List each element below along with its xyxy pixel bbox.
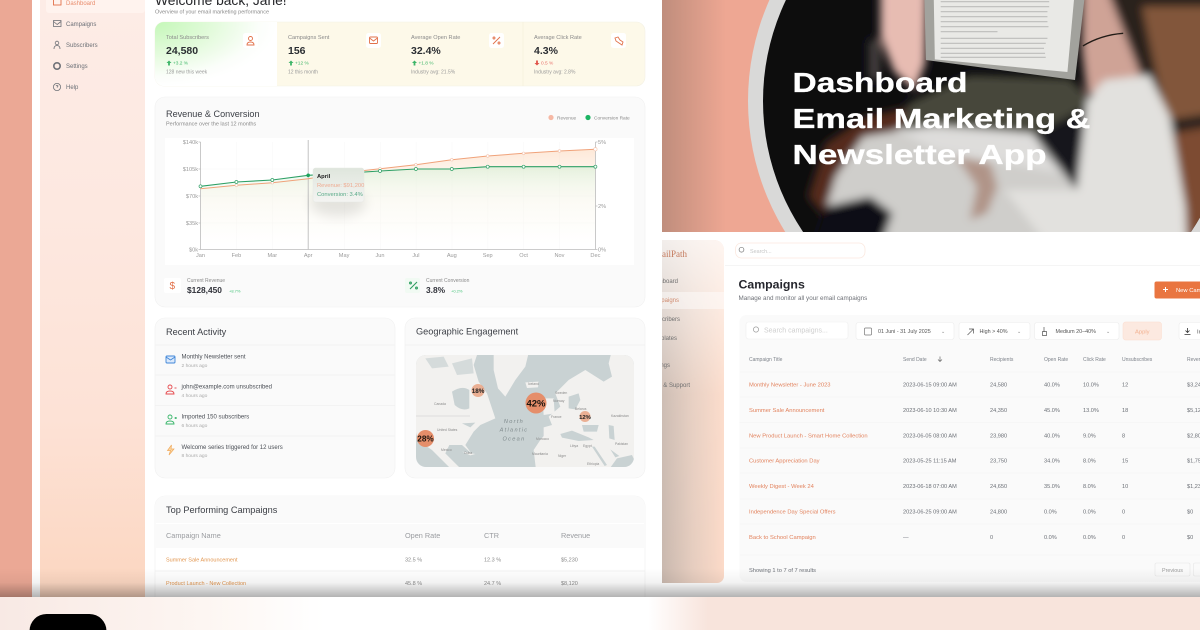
bubble 28%: 28%: [417, 435, 434, 444]
date filter: [856, 322, 954, 340]
row 4: 2023-05-25 11:15 AM: [903, 458, 957, 464]
place labels: Egypt: [583, 444, 592, 448]
row 5: 35.0%: [1044, 484, 1060, 490]
activity: newsletter sent: 2 hours ago: [182, 363, 208, 369]
row 7: 0: [990, 535, 993, 541]
activity heading: Recent Activity: [166, 327, 227, 337]
card: total subscribers: +3.2 %: [173, 60, 189, 66]
ocean label: North: [504, 419, 524, 425]
date filter: ⌄: [941, 329, 945, 335]
y axis left labels: $140k: [183, 140, 198, 146]
lower right campaigns screen: [648, 232, 1200, 597]
axes: [198, 142, 598, 250]
row 5: 2023-06-18 07:00 AM: [903, 484, 957, 490]
date filter: 01 Juni - 31 July 2025: [878, 329, 931, 335]
row: summer sale: $5,230: [561, 558, 578, 564]
x axis labels: Apr: [304, 253, 313, 259]
top search box: [736, 243, 865, 258]
row 1: 12: [1122, 382, 1128, 388]
bubble 18%: 18%: [472, 388, 485, 395]
place labels: France: [551, 415, 562, 419]
campaigns sidebar: Help & Support: [649, 383, 690, 389]
row: product launch: [166, 581, 578, 587]
row: product launch: Product Launch - New Collection: [166, 581, 246, 587]
x axis labels: Nov: [555, 253, 565, 259]
place labels: Libya: [570, 444, 578, 448]
campaigns sidebar: Dashboard: [649, 279, 678, 285]
place labels: Iceland: [528, 382, 539, 386]
table header row: Open Rate: [405, 531, 440, 540]
row 5: 8.0%: [1083, 484, 1096, 490]
row 6: [749, 510, 1193, 516]
ocean label: Ocean: [503, 436, 525, 442]
card: average open rate: 32.4%: [411, 45, 441, 57]
geo heading: Geographic Engagement: [416, 326, 519, 336]
ocean label: [500, 419, 527, 440]
table header: Click Rate: [1083, 357, 1106, 363]
activity: unsubscribed: 4 hours ago: [182, 393, 208, 399]
row 2: Summer Sale Announcement: [749, 408, 825, 414]
x axis labels: Sep: [483, 253, 493, 259]
place labels: Ethiopia: [587, 462, 599, 466]
place labels: Kazakhstan: [611, 414, 629, 418]
activity: welcome series: [168, 445, 283, 459]
row 6: 2023-06-25 09:00 AM: [903, 510, 957, 516]
row 4: [749, 458, 1200, 464]
place labels: Canada: [434, 402, 446, 406]
campaigns sidebar: Subscribers: [648, 317, 680, 323]
row: product launch: $8,120: [561, 581, 578, 587]
row 3: 40.0%: [1044, 433, 1060, 439]
new campaign button: [1154, 282, 1200, 298]
table header row: [166, 531, 590, 540]
KPI card strip: [155, 22, 645, 86]
row: product launch: 24.7 %: [484, 581, 501, 587]
open rate filter: ⌄: [1017, 329, 1021, 335]
nav label: dashboard: Dashboard: [66, 1, 95, 7]
bubble 42%: [526, 392, 546, 414]
x axis labels: Mar: [267, 253, 277, 259]
legend: [548, 115, 630, 122]
place labels: Morocco: [536, 437, 549, 441]
row 6: $0: [1187, 510, 1193, 516]
place labels: Norway: [553, 399, 565, 403]
nav label: subscribers: Subscribers: [66, 43, 98, 49]
row 2: 13.0%: [1083, 408, 1099, 414]
campaigns sidebar: Templates: [650, 336, 677, 342]
row 6: 0.0%: [1044, 510, 1057, 516]
x axis labels: Aug: [447, 253, 457, 259]
black logo badge: [30, 614, 106, 630]
bottom shadow: [0, 568, 1200, 597]
row 1: 10.0%: [1083, 382, 1099, 388]
panel: recent activity: [155, 318, 395, 478]
row: summer sale: 12.3 %: [484, 558, 501, 564]
row 6: 0: [1122, 510, 1125, 516]
stat: current revenue: Current Revenue: [187, 278, 225, 284]
stat: current conversion: [405, 278, 470, 295]
bubble 18%: [472, 384, 485, 397]
hero title: Email Marketing &: [792, 103, 1090, 134]
table header: [749, 356, 1200, 363]
activity: imported: [166, 415, 249, 429]
revenue line: [200, 148, 597, 189]
main heading: [155, 0, 287, 16]
row 7: —: [903, 535, 909, 541]
row 2: 2023-06-10 10:30 AM: [903, 408, 957, 414]
activity: imported: Imported 150 subscribers: [182, 415, 249, 421]
row 2: 18: [1122, 408, 1128, 414]
pagination buttons: [1155, 563, 1200, 576]
card: total subscribers: 24,580: [166, 45, 198, 57]
y axis left labels: $105k: [183, 167, 198, 173]
world map: [416, 355, 634, 467]
row 3: 9.0%: [1083, 433, 1096, 439]
row 5: [749, 484, 1200, 490]
card: total subscribers: [155, 22, 277, 86]
left salmon band: [0, 0, 32, 597]
y axis right labels: [598, 140, 606, 254]
nav icon: campaigns: [54, 20, 61, 26]
page title: Campaigns: [738, 278, 805, 292]
row 5: 24,650: [990, 484, 1007, 490]
activity: imported: 6 hours ago: [182, 423, 208, 429]
nav icon: dashboard: [54, 0, 61, 5]
page subtitle: Manage and monitor all your email campaigns: [738, 295, 867, 302]
hero title: Newsletter App: [792, 139, 1046, 170]
chart heading: Revenue & Conversion: [166, 109, 260, 119]
row 4: Customer Appreciation Day: [749, 458, 820, 464]
stat: current conversion: Current Conversion: [426, 278, 470, 284]
table panel: [740, 315, 1200, 582]
hero title: Dashboard: [792, 67, 968, 98]
panel: geographic engagement: [405, 318, 645, 478]
row 2: 24,350: [990, 408, 1007, 414]
x axis labels: Oct: [519, 253, 528, 259]
row 3: 8: [1122, 433, 1125, 439]
panel: revenue and conversion: [155, 97, 645, 307]
stat: current revenue: $128,450: [187, 285, 222, 295]
card: campaigns sent: [288, 33, 381, 76]
row 4: 15: [1122, 458, 1128, 464]
row 1: 40.0%: [1044, 382, 1060, 388]
row 5: Weekly Digest - Week 24: [749, 484, 815, 490]
open rate filter: High > 40%: [980, 329, 1008, 335]
active nav highlight: [46, 0, 145, 13]
card: average click rate: Industry avg: 2.8%: [534, 70, 576, 76]
place labels: United States: [437, 428, 458, 432]
campaigns sidebar: [662, 240, 724, 583]
panel: top performing campaigns: [155, 496, 645, 616]
pagination summary: Showing 1 to 7 of 7 results: [749, 568, 816, 574]
place labels: [434, 382, 629, 466]
table header row: CTR: [484, 531, 499, 540]
x axis labels: Jan: [196, 253, 205, 259]
bubble 12%: 12%: [579, 415, 592, 421]
search campaigns input: Search campaigns...: [764, 328, 828, 334]
row 5: 10: [1122, 484, 1128, 490]
card: average click rate: Average Click Rate: [534, 35, 582, 41]
row 4: 34.0%: [1044, 458, 1060, 464]
table header: Unsubscribes: [1122, 357, 1153, 363]
place labels: Belarus: [575, 407, 587, 411]
row 7: 0: [1122, 535, 1125, 541]
row 1: Monthly Newsletter - June 2023: [749, 382, 831, 388]
bubble 12%: [579, 411, 592, 422]
row 1: [749, 382, 1200, 388]
hero photo circle: reading on a tablet: [748, 0, 1200, 232]
row 6: 24,800: [990, 510, 1007, 516]
stat: current conversion: +0.2%: [451, 288, 463, 294]
right salmon background: [662, 0, 1200, 232]
legend: Conversion Rate: [594, 116, 630, 122]
subheading: Overview of your email marketing performance: [155, 10, 269, 16]
campaigns sidebar: Settings: [648, 363, 670, 369]
row 3: New Product Launch - Smart Home Collection: [749, 433, 868, 439]
place labels: Cuba: [464, 451, 472, 455]
row 7: 0.0%: [1044, 535, 1057, 541]
activity: unsubscribed: john@example.com unsubscribed: [180, 384, 272, 390]
activity: newsletter sent: [166, 354, 246, 369]
nav icon: help: [53, 83, 61, 91]
row 2: 45.0%: [1044, 408, 1060, 414]
row 7: $0: [1187, 535, 1193, 541]
card: average open rate: Industry avg: 21.5%: [411, 70, 456, 76]
left dashboard sidebar: [40, 0, 145, 597]
nav label: campaigns: Campaigns: [66, 22, 96, 28]
bottom strip: [0, 597, 1200, 630]
activity: unsubscribed: [166, 384, 272, 399]
row 7: 0.0%: [1083, 535, 1096, 541]
row: product launch: 45.8 %: [405, 581, 422, 587]
table header: Recipients: [990, 357, 1014, 363]
top search box: Search...: [750, 249, 772, 255]
row 6: Independence Day Special Offers: [749, 510, 836, 516]
y axis right labels: 0%: [598, 248, 606, 254]
import button: [1179, 322, 1200, 340]
row 7: Back to School Campaign: [749, 535, 816, 541]
click rate filter: ⌄: [1106, 329, 1110, 335]
row 3: [749, 433, 1200, 439]
row 2: [749, 408, 1200, 414]
place labels: Sweden: [555, 391, 567, 395]
pagination buttons: Previous: [1162, 568, 1183, 574]
place labels: Mauritania: [532, 452, 548, 456]
card: average click rate: 4.3%: [534, 45, 559, 57]
nav icon: settings: [54, 63, 60, 69]
table header: Open Rate: [1044, 357, 1068, 363]
click rate filter: Medium 20–40%: [1056, 329, 1096, 335]
card: average open rate: Average Open Rate: [411, 35, 460, 41]
bubble 42%: 42%: [526, 398, 546, 410]
row: summer sale: [166, 558, 578, 564]
table heading: Top Performing Campaigns: [166, 505, 278, 515]
row 4: 23,750: [990, 458, 1007, 464]
table header: Send Date: [903, 357, 927, 363]
activity: newsletter sent: Monthly Newsletter sent: [182, 354, 246, 360]
y axis left labels: $35k: [186, 221, 198, 227]
place labels: Mexico: [441, 448, 452, 452]
card: campaigns sent: 12 this month: [288, 70, 318, 76]
x axis labels: Jul: [412, 253, 419, 259]
card: campaigns sent: +12 %: [295, 60, 309, 66]
stat: current conversion: 3.8%: [426, 285, 446, 295]
hero title: [792, 67, 1090, 170]
place labels: Pakistan: [615, 442, 628, 446]
row 4: 8.0%: [1083, 458, 1096, 464]
row: summer sale: 32.5 %: [405, 558, 422, 564]
card: total subscribers: Total Subscribers: [166, 35, 209, 41]
brand name: MailPath: [654, 249, 687, 259]
row: summer sale: Summer Sale Announcement: [166, 558, 238, 564]
x axis labels: Jun: [375, 253, 385, 259]
card: average click rate: [523, 22, 626, 86]
x axis labels: Feb: [232, 253, 241, 259]
ocean label: Atlantic: [499, 428, 528, 434]
nav label: settings: Settings: [66, 64, 88, 70]
card: average click rate: 0.5 %: [541, 60, 554, 66]
y axis left labels: $70k: [186, 194, 198, 200]
table header: Campaign Title: [749, 357, 783, 363]
campaigns sidebar: Campaigns: [649, 298, 679, 304]
row 3: 23,980: [990, 433, 1007, 439]
open rate filter: [959, 322, 1030, 340]
row 1: 2023-06-15 09:00 AM: [903, 382, 957, 388]
card: campaigns sent: Campaigns Sent: [288, 35, 330, 41]
table header row: Campaign Name: [166, 531, 221, 540]
card: total subscribers: 128 new this week: [166, 70, 208, 76]
y axis right labels: 2%: [598, 204, 606, 210]
activity: welcome series: 8 hours ago: [182, 453, 208, 459]
x axis labels: May: [339, 253, 350, 259]
stat: current revenue: [164, 278, 241, 295]
nav icon: subscribers: [54, 41, 60, 49]
legend: Revenue: [557, 116, 577, 122]
chart subheading: Performance over the last 12 months: [166, 122, 256, 128]
click rate filter: [1034, 322, 1119, 340]
y axis right labels: 5%: [598, 140, 606, 146]
row 6: 0.0%: [1083, 510, 1096, 516]
activity: welcome series: Welcome series triggered for 12 users: [182, 445, 283, 451]
card: campaigns sent: 156: [288, 45, 306, 57]
search campaigns input: [746, 322, 848, 339]
april marker line: [307, 140, 309, 250]
tooltip: April: [317, 174, 331, 180]
y axis left labels: [183, 140, 198, 254]
tooltip: Conversion: 3.4%: [317, 192, 363, 198]
row 7: [749, 535, 1193, 541]
table header row: Revenue: [561, 531, 590, 540]
card: average open rate: [411, 33, 504, 76]
nav label: help: Help: [66, 85, 79, 91]
bubble 28%: [417, 430, 434, 447]
conversion line: [199, 165, 597, 188]
line chart: [165, 138, 634, 265]
x axis labels: Dec: [590, 253, 601, 259]
apply button: [1123, 322, 1162, 340]
x axis labels: [196, 253, 601, 259]
tooltip: Revenue: $91,200: [317, 183, 364, 189]
tooltip: [310, 168, 366, 217]
card: average open rate: +1.8 %: [418, 60, 434, 66]
stat: current revenue: +8.7%: [229, 288, 241, 294]
place labels: Niger: [558, 454, 567, 458]
apply button: Apply: [1135, 330, 1150, 336]
stat: current revenue: $: [170, 281, 176, 292]
row 3: 2023-06-05 08:00 AM: [903, 433, 957, 439]
y axis left labels: $0k: [189, 248, 198, 254]
row 1: 24,580: [990, 382, 1007, 388]
